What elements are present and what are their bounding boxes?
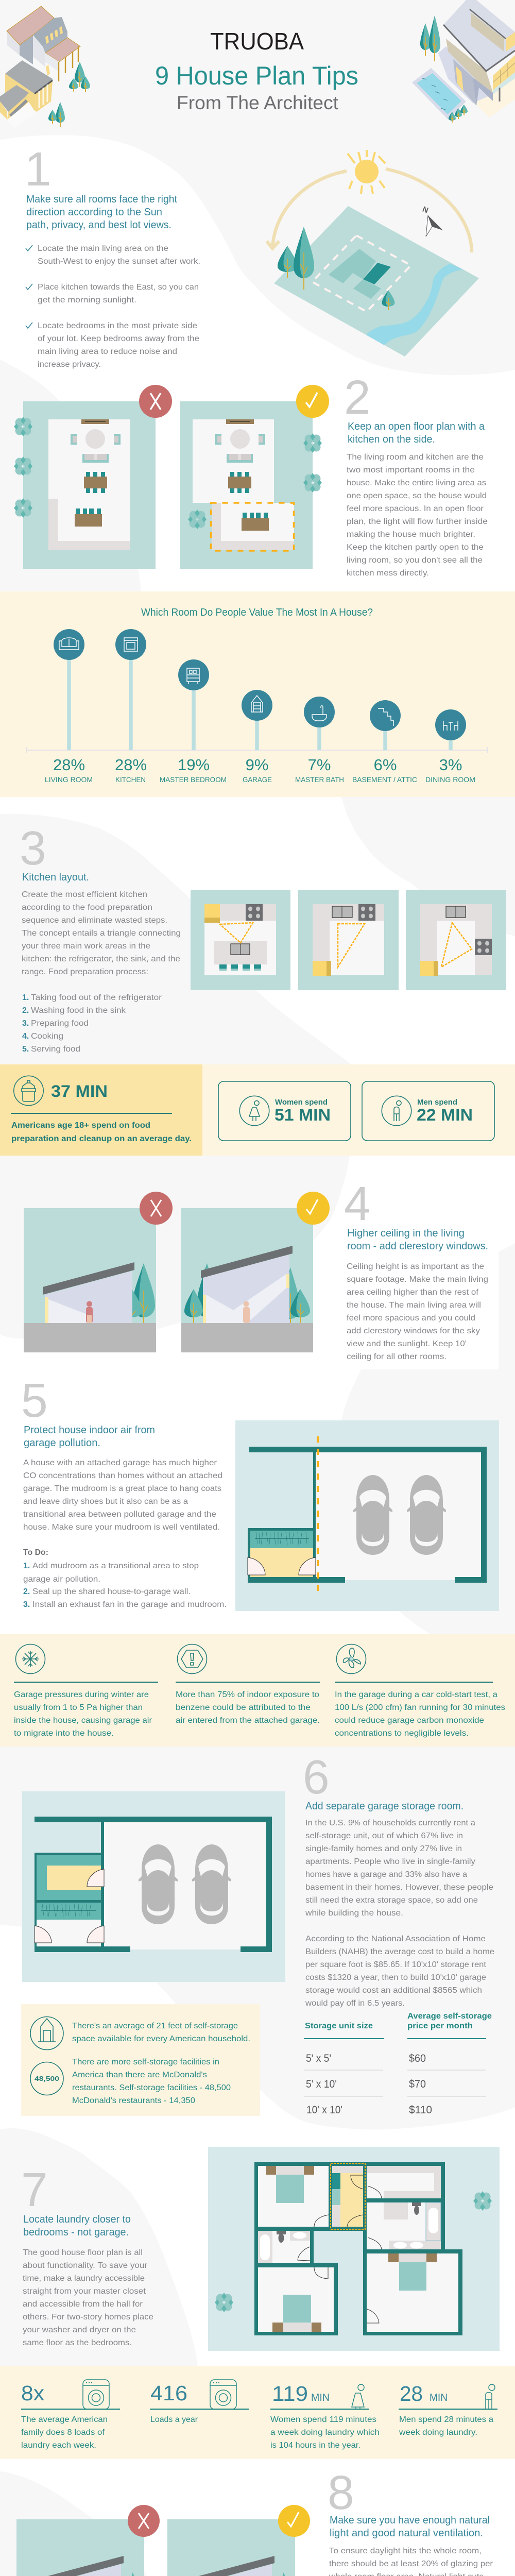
body text 6: In the U.S. 9% of households currently rent a: [305, 1819, 475, 1827]
stat 28 min: 28: [400, 2382, 423, 2405]
number 2: 2: [344, 370, 371, 424]
icon: dining: [443, 721, 458, 731]
callout: self-storage facts: There's an average of 21 feet of self-storage: [72, 2022, 238, 2030]
walls: [254, 2162, 462, 2335]
body text 7: about functionality. To save your: [23, 2261, 148, 2270]
garage plan with mudroom: [235, 1420, 499, 1611]
number 4: 4: [344, 1177, 371, 1230]
body text 6: storage would cost an additional $8565 which: [305, 1986, 482, 1995]
fact: benzene exposure: benzene could be attributed to the: [176, 1703, 311, 1712]
panel: tip 4 higher ceiling: [24, 1177, 488, 1361]
storage price table: 5' x 10': [306, 2078, 337, 2090]
body text 3: according to the food preparation: [22, 903, 152, 912]
body text 7: The good house floor plan is all: [23, 2248, 143, 2257]
body text 4: add clerestory windows for the sky: [347, 1327, 480, 1335]
food preparation list: Taking food out of the refrigerator: [31, 993, 162, 1002]
stat 37 min: Americans age 18+ spend on food: [11, 1121, 150, 1130]
stat 416: [150, 2380, 249, 2424]
body text 7: your washer and dryer on the: [23, 2326, 136, 2334]
heading 2: Keep an open floor plan with a: [348, 421, 485, 432]
storage price table: 10' x 10': [306, 2104, 342, 2116]
fact: exhaust fan: concentrations to negligible levels.: [335, 1729, 469, 1738]
stat 28 min: MIN: [430, 2392, 448, 2403]
heading 6: Add separate garage storage room.: [305, 1801, 464, 1812]
checklist: Place kitchen towards the East, so you can: [38, 283, 199, 292]
men stat card: [362, 1081, 494, 1141]
body text 7: others. For two-story homes place: [23, 2313, 153, 2321]
number 7: 7: [21, 2163, 48, 2216]
storage price table: price per month: [407, 2022, 473, 2030]
heading 4: Higher ceiling in the living: [347, 1228, 465, 1239]
logo: TRUOBA: [210, 28, 304, 55]
icon: garage: [251, 696, 263, 712]
heading 7: bedrooms - not garage.: [23, 2227, 129, 2238]
panel: time outdoors stats: [19, 2458, 515, 2576]
food preparation list: 3.: [22, 1019, 29, 1028]
house floor plan: [208, 2147, 500, 2351]
body text 2: The living room and kitchen are the: [347, 453, 484, 462]
to do list: To Do:: [23, 1548, 48, 1557]
food preparation list: Preparing food: [31, 1019, 89, 1028]
kitchen plan U-shape: [406, 890, 506, 990]
to do list: 2.: [23, 1587, 30, 1596]
body text 7: time, make a laundry accessible: [23, 2274, 145, 2283]
body text 3: kitchen: the refrigerator, the sink, and the: [22, 955, 180, 963]
stat 8x: family does 8 loads of: [21, 2428, 105, 2437]
body text 2: feel more spacious. In an open floor: [347, 504, 484, 513]
checklist: [26, 244, 200, 369]
body text 7: same floor as the bedrooms.: [23, 2338, 132, 2347]
kitchen plan island: [191, 890, 290, 990]
title: From The Architect: [177, 92, 339, 113]
section drawing high ceiling: [181, 1192, 330, 1352]
to do list: Seal up the shared house-to-garage wall.: [32, 1587, 191, 1596]
heading 1: direction according to the Sun: [26, 207, 162, 218]
door swings: [298, 2175, 382, 2323]
food preparation list: Cooking: [31, 1032, 63, 1041]
panel: tip 1 sun orientation: [25, 142, 479, 369]
body text 5: garage. The mudroom is a great place to hang coats: [23, 1484, 221, 1493]
food preparation list: 5.: [22, 1045, 29, 1054]
callout: self-storage facts: restaurants. Self-storage facilities - 48,500: [72, 2083, 231, 2092]
panel: tip 7 laundry: [21, 2147, 500, 2351]
fact: winter pressure: inside the house, causing garage air: [14, 1716, 152, 1725]
body text 8: To ensure daylight hits the whole room,: [329, 2547, 482, 2555]
heading 3: Kitchen layout.: [22, 872, 89, 883]
body text 2: kitchen mess directly.: [347, 569, 429, 578]
body text 4: [347, 1262, 488, 1361]
heading 7: Locate laundry closer to: [23, 2214, 131, 2225]
body text 6: per square foot is $85.65. If 10'x10' storage rent: [305, 1960, 487, 1969]
callout: self-storage facts: There are more self-storage facilities in: [72, 2058, 219, 2066]
icon: shelf bedroom: [187, 668, 199, 684]
women stat card: 51 MIN: [274, 1106, 331, 1124]
storage price table: Average self-storage: [407, 2012, 492, 2021]
women stat card: [218, 1081, 351, 1141]
stat 119 min: MIN: [311, 2392, 330, 2403]
body text 4: the house. The main living area will: [347, 1301, 481, 1310]
heading 5: [24, 1425, 155, 1449]
stat 8x: The average American: [21, 2415, 108, 2424]
callout: self-storage facts: 48,500: [35, 2075, 59, 2082]
fact: winter pressure: [14, 1645, 158, 1738]
percentages and labels: KITCHEN: [115, 775, 146, 784]
panel: garage air facts: [0, 1634, 515, 1747]
stat 416: 416: [150, 2381, 187, 2405]
title: [155, 61, 358, 113]
food preparation list: Washing food in the sink: [31, 1006, 126, 1015]
number 8: 8: [328, 2466, 354, 2519]
body text 2: two most important rooms in the: [347, 466, 475, 474]
stat 119 min: is 104 hours in the year.: [270, 2441, 360, 2450]
body text 5: house. Make sure your mudroom is well ventilated.: [23, 1523, 220, 1532]
body text 6: [305, 1819, 494, 2008]
checklist: main living area to reduce noise and: [38, 347, 177, 356]
body text 6: basement in their homes. However, these people: [305, 1883, 493, 1892]
stat 28 min: [399, 2382, 497, 2437]
body text 6: self-storage unit, out of which 67% live in: [305, 1832, 463, 1840]
heading 7: [23, 2214, 131, 2238]
body text 8: there should be at least 20% of glazing per: [329, 2560, 493, 2568]
body text 4: Ceiling height is as important as the: [347, 1262, 484, 1271]
body text 5: transitional area between polluted garage and the: [23, 1510, 216, 1519]
heading 4: [347, 1228, 488, 1252]
fact: exhaust fan: [335, 1645, 505, 1738]
stat 37 min: [11, 1082, 192, 1143]
fact: benzene exposure: More than 75% of indoor exposure to: [176, 1690, 319, 1699]
number 3: 3: [20, 821, 46, 875]
percentages and labels: 9%: [246, 756, 268, 774]
storage price table: [304, 2012, 492, 2116]
percentages and labels: 3%: [439, 756, 462, 774]
callout: self-storage facts: space available for every American household.: [72, 2035, 250, 2043]
panel: tip 5 garage pollution: [21, 1374, 499, 1611]
floor plan wrong: [14, 385, 172, 569]
heading 8: light and good natural ventilation.: [330, 2528, 483, 2539]
sun path diagram: N: [421, 205, 430, 215]
body text 6: homes have a garage and 33% also have a: [305, 1870, 467, 1879]
heading 5: Protect house indoor air from: [24, 1425, 155, 1436]
body text 3: Create the most efficient kitchen: [22, 890, 147, 899]
percentages and labels: 28%: [53, 756, 85, 774]
section tall window: [167, 2505, 310, 2576]
garage plan with storage: [22, 1791, 285, 1982]
stat 37 min: preparation and cleanup on an average day.: [11, 1134, 192, 1143]
body text 3: [22, 890, 181, 976]
body text 7: straight from your master closet: [23, 2287, 146, 2296]
percentages and labels: 19%: [178, 756, 210, 774]
body text 6: According to the National Association of Home: [305, 1935, 486, 1943]
floor plan right: [180, 385, 329, 569]
panel: tip 6 storage room: [21, 1750, 494, 2116]
checklist: Locate the main living area on the: [38, 244, 168, 253]
section small window: [16, 2505, 160, 2576]
panel: tip 3 kitchen layout: [20, 821, 506, 1054]
body text 2: one open space, so the house would: [347, 492, 487, 500]
to do list: 3.: [23, 1600, 30, 1609]
percentages and labels: GARAGE: [243, 775, 272, 784]
kitchen plan L-shape: [298, 890, 399, 990]
percentages and labels: [45, 756, 475, 784]
body text 4: feel more spacious and you could: [347, 1314, 475, 1323]
panel: food preparation time stats: [0, 1064, 515, 1156]
chart title: Which Room Do People Value The Most In A House?: [141, 607, 373, 618]
heading 1: Make sure all rooms face the right: [26, 194, 177, 205]
body text 4: square footage. Make the main living: [347, 1275, 488, 1284]
food preparation list: 1.: [22, 993, 29, 1002]
percentages and labels: 28%: [115, 756, 147, 774]
heading 1: [26, 194, 177, 231]
stat 8x: laundry each week.: [21, 2441, 96, 2450]
lollipop chart: [26, 629, 487, 753]
checklist: increase privacy.: [38, 360, 101, 369]
callout: self-storage facts: [21, 2004, 260, 2116]
body text 3: your three main work areas in the: [22, 942, 150, 951]
food preparation list: 4.: [22, 1032, 29, 1041]
heading 4: room - add clerestory windows.: [347, 1241, 488, 1252]
icon: stairs: [378, 708, 393, 726]
body text 3: The concept entails a triangle connecting: [22, 929, 181, 938]
panel: tip 2 open floor plan: [14, 370, 488, 578]
men stat card: 22 MIN: [417, 1106, 473, 1124]
panel: tip 8 natural light: [16, 2466, 494, 2576]
stat 119 min: Women spend 119 minutes: [270, 2415, 376, 2424]
stat 119 min: 119: [272, 2382, 308, 2405]
body text 2: plan, the light will flow further inside: [347, 517, 488, 526]
body text 6: still need the extra storage space, so add one: [305, 1896, 478, 1905]
body text 3: range. Food preparation process:: [22, 968, 148, 976]
stat 28 min: week doing laundry.: [399, 2428, 477, 2437]
body text 5: CO concentrations than homes without an attached: [23, 1471, 222, 1480]
checklist: South-West to enjoy the sunset after work.: [38, 257, 200, 266]
to do list: Add mudroom as a transitional area to stop: [32, 1562, 199, 1570]
body text 2: making the house much brighter.: [347, 530, 475, 539]
to do list: Install an exhaust fan in the garage and mudroom.: [32, 1600, 227, 1609]
body text 4: view and the sunlight. Keep 10': [347, 1340, 467, 1348]
panel: laundry stats: [0, 2366, 515, 2459]
icon: sofa: [59, 638, 79, 650]
heading 8: Make sure you have enough natural: [330, 2515, 490, 2526]
stat 37 min: 37 MIN: [51, 1082, 108, 1100]
percentages and labels: 7%: [308, 756, 331, 774]
body text 7: [23, 2248, 153, 2347]
storage price table: Storage unit size: [305, 2022, 373, 2030]
checklist: of your lot. Keep bedrooms away from the: [38, 334, 199, 343]
heading 5: garage pollution.: [24, 1437, 100, 1449]
body text 6: Builders (NAHB) the average cost to build a home: [305, 1947, 494, 1956]
section drawing low ceiling: [24, 1192, 173, 1352]
body text 4: area ceiling higher than the rest of: [347, 1288, 479, 1297]
fact: benzene exposure: air entered from the attached garage.: [176, 1716, 320, 1725]
icon: pot: [14, 1076, 43, 1106]
sun path diagram: [267, 150, 479, 357]
house illustration top right: [412, 0, 515, 123]
body text 2: Keep the kitchen partly open to the: [347, 543, 484, 552]
callout: self-storage facts: America than there are McDonald's: [72, 2071, 207, 2079]
percentages and labels: LIVING ROOM: [45, 775, 93, 784]
stat 416: Loads a year: [150, 2415, 198, 2424]
storage price table: $110: [409, 2104, 432, 2116]
body text 5: [23, 1459, 222, 1532]
body text 6: while building the house.: [305, 1909, 403, 1918]
fact: winter pressure: to migrate into the house.: [14, 1729, 114, 1738]
callout: self-storage facts: McDonald's restaurants - 14,350: [72, 2096, 195, 2105]
stat 119 min: a week doing laundry which: [270, 2428, 380, 2437]
icon: kitchen unit: [124, 638, 138, 651]
body text 2: house. Make the entire living area as: [347, 479, 486, 487]
heading 2: [348, 421, 485, 445]
body text 4: ceiling for all other rooms.: [347, 1352, 447, 1361]
body text 6: apartments. People who live in single-family: [305, 1857, 475, 1866]
checklist: get the morning sunlight.: [38, 296, 136, 304]
title: 9 House Plan Tips: [155, 61, 358, 90]
food preparation list: 2.: [22, 1006, 29, 1015]
storage price table: $70: [409, 2078, 426, 2090]
percentages and labels: 6%: [374, 756, 397, 774]
to do list: 1.: [23, 1562, 30, 1570]
percentages and labels: BASEMENT / ATTIC: [352, 775, 417, 784]
house illustration top left: [0, 6, 90, 128]
body text 2: living room, so you don't see all the: [347, 556, 483, 565]
storage price table: 5' x 5': [306, 2053, 331, 2064]
body text 5: and leave dirty shoes but it also can be as a: [23, 1497, 188, 1506]
number 6: 6: [303, 1750, 330, 1804]
men stat card: Men spend: [417, 1098, 457, 1107]
percentages and labels: MASTER BATH: [295, 775, 344, 784]
number 5: 5: [21, 1374, 48, 1427]
panel: room value chart: [0, 591, 515, 797]
fact: exhaust fan: 100 L/s (200 cfm) fan running for 30 minutes: [335, 1703, 505, 1712]
stat 119 min: [270, 2382, 380, 2450]
food preparation list: [22, 993, 162, 1054]
number 1: 1: [25, 142, 52, 196]
checklist: Locate bedrooms in the most private side: [38, 321, 197, 330]
body text 6: single-family homes and only 27% live in: [305, 1844, 462, 1853]
storage price table: $60: [409, 2053, 426, 2064]
to do list: garage air pollution.: [23, 1575, 100, 1584]
stat ring 7 of 10: [415, 2458, 515, 2576]
stat 28 min: Men spend 28 minutes a: [399, 2415, 493, 2424]
percentages and labels: DINING ROOM: [425, 775, 475, 784]
body text 8: [329, 2547, 494, 2576]
body text 6: costs $1320 a year, then to build 10'x10' garage: [305, 1973, 486, 1982]
percentages and labels: MASTER BEDROOM: [160, 775, 227, 784]
heading 2: kitchen on the side.: [348, 434, 435, 445]
fact: benzene exposure: [176, 1645, 320, 1725]
fact: winter pressure: Garage pressures during winter are: [14, 1690, 149, 1699]
body text 6: would pay off in 6.5 years.: [305, 1999, 405, 2008]
body text 7: and accessible from the hall for: [23, 2300, 143, 2309]
stat 8x: 8x: [21, 2381, 45, 2405]
women stat card: Women spend: [275, 1098, 328, 1107]
heading 1: path, privacy, and best lot views.: [26, 219, 171, 231]
fact: exhaust fan: could reduce garage carbon monoxide: [335, 1716, 484, 1725]
body text 3: sequence and eliminate wasted steps.: [22, 916, 167, 925]
fact: exhaust fan: In the garage during a car cold-start test, a: [335, 1690, 497, 1699]
fact: winter pressure: usually from 1 to 5 Pa higher than: [14, 1703, 143, 1712]
body text 2: [347, 453, 488, 578]
body text 5: A house with an attached garage has much higher: [23, 1459, 217, 1467]
stat 8x: [21, 2380, 120, 2450]
heading 8: [330, 2515, 490, 2539]
food preparation list: Serving food: [31, 1045, 80, 1054]
to do list: [23, 1548, 227, 1609]
icon: bathtub: [312, 706, 327, 721]
